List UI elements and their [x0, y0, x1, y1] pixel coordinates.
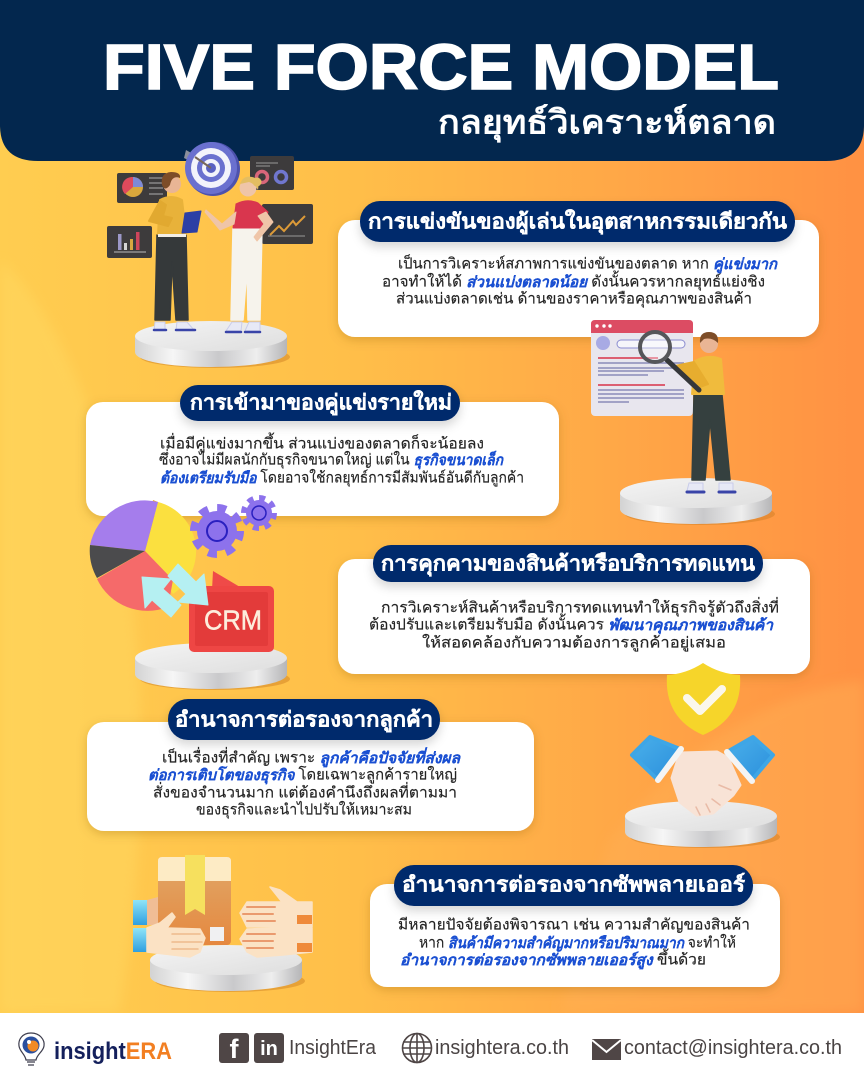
panel: donut charts [250, 156, 294, 190]
pie chart [90, 500, 196, 611]
heading pill [360, 201, 795, 242]
parcel box [158, 855, 231, 945]
browser window [591, 320, 693, 416]
illustration: box and hands [133, 855, 312, 992]
body text: มีหลายปัจจัยต้องพิจารณา เช่น ความสำคัญของสินค้า [398, 916, 750, 934]
card [338, 220, 819, 337]
card [338, 559, 810, 674]
icon: target [184, 142, 240, 196]
illustration: shield and handshake [625, 663, 780, 848]
panel: rivalry [338, 201, 819, 337]
body text: ต้องปรับและเตรียมรับมือ ดังนั้นควร พัฒนาคุณภาพของสินค้า [369, 614, 775, 634]
footer [0, 1013, 864, 1080]
illustration: team with charts and target [107, 142, 313, 368]
panel: substitutes [338, 545, 810, 674]
heading pill: การเข้ามาของคู่แข่งรายใหม่ [190, 390, 452, 416]
panel: supplier power [370, 865, 780, 987]
logo: insightERA [54, 1038, 172, 1064]
heading pill: อำนาจการต่อรองจากซัพพลายเออร์ [402, 872, 746, 896]
illustration: pie chart and CRM [90, 498, 290, 690]
icon: gears [194, 498, 274, 554]
panel: line chart [262, 204, 313, 244]
icon: facebook [219, 1033, 249, 1064]
heading pill [168, 699, 440, 740]
figure: man [675, 332, 735, 492]
body text [398, 916, 750, 970]
CRM badge: CRM [204, 604, 262, 636]
icon: arrows [142, 564, 208, 617]
body text: ให้สอดคล้องกับความต้องการลูกค้าอยู่เสมอ [422, 634, 726, 652]
icon: handshake [632, 737, 773, 815]
subtitle: กลยุทธ์วิเคราะห์ตลาด [438, 104, 776, 144]
icon: left hands [133, 897, 205, 957]
email: contact@insightera.co.th [624, 1037, 842, 1059]
body text [159, 432, 524, 488]
figure: man with tablet [149, 172, 201, 330]
card [370, 884, 780, 987]
body text: ของธุรกิจและนำไปปรับให้เหมาะสม [196, 800, 412, 820]
CRM badge [189, 571, 274, 652]
body text: ส่วนแบ่งตลาดเช่น ด้านของราคาหรือคุณภาพของสินค้า [396, 290, 752, 308]
icon: shield [667, 663, 740, 735]
body text: การวิเคราะห์สินค้าหรือบริการทดแทนทำให้ธุรกิจรู้ตัวถึงสิ่งที่ [381, 596, 779, 618]
icon: envelope [592, 1039, 621, 1060]
body text [369, 596, 779, 652]
icon: linkedin: in [260, 1038, 278, 1060]
panel: new entrants [86, 385, 559, 516]
icon: right hands [240, 887, 312, 957]
title: FIVE FORCE MODEL [103, 31, 779, 103]
body text: ซึ่งอาจไม่มีผลนักกับธุรกิจขนาดใหญ่ แต่ใน ธุรกิจขนาดเล็ก [159, 448, 504, 470]
body text: เป็นการวิเคราะห์สภาพการแข่งขันของตลาด หาก คู่แข่งมาก [398, 254, 778, 274]
body text [148, 746, 461, 820]
body text: ต่อการเติบโตของธุรกิจ โดยเฉพาะลูกค้ารายใหญ่ [148, 764, 457, 784]
social handle: InsightEra [289, 1037, 377, 1059]
heading pill: การแข่งขันของผู้เล่นในอุตสาหกรรมเดียวกัน [368, 208, 788, 236]
heading pill [373, 545, 763, 582]
body text: อำนาจการต่อรองจากซัพพลายเออร์สูง ขึ้นด้วย [400, 948, 706, 970]
header band [0, 0, 864, 161]
card [86, 402, 559, 516]
body text: ต้องเตรียมรับมือ โดยอาจใช้กลยุทธ์การมีสัมพันธ์อันดีกับลูกค้า [160, 468, 524, 488]
figure: woman [205, 177, 273, 332]
heading pill [180, 385, 460, 421]
body text: หาก สินค้ามีความสำคัญมากหรือปริมาณมาก จะทำให้ [419, 934, 736, 952]
panel: buyer power [87, 699, 534, 831]
illustration: man with magnifier [591, 320, 775, 525]
heading pill: อำนาจการต่อรองจากลูกค้า [175, 708, 433, 734]
heading pill: การคุกคามของสินค้าหรือบริการทดแทน [381, 552, 756, 578]
icon: magnifier [640, 332, 699, 390]
logo [19, 1033, 172, 1065]
icon: facebook: f [230, 1034, 240, 1064]
panel: pie chart [117, 173, 167, 203]
body text: เมื่อมีคู่แข่งมากขึ้น ส่วนแบ่งของตลาดก็จะน้อยลง [160, 432, 484, 452]
body text: สั่งของจำนวนมาก แต่ต้องคำนึงถึงผลที่ตามมา [153, 782, 457, 802]
heading pill [394, 865, 753, 906]
body text: อาจทำให้ได้ ส่วนแบ่งตลาดน้อย ดังนั้นควรหากลยุทธ์แย่งชิง [382, 270, 765, 292]
card [87, 722, 534, 831]
panel: bar chart [107, 226, 152, 258]
icon: linkedin [254, 1033, 284, 1063]
body text: เป็นเรื่องที่สำคัญ เพราะ ลูกค้าคือปัจจัยที่ส่งผล [162, 746, 461, 768]
icon: globe [402, 1034, 432, 1062]
body text [382, 254, 778, 308]
website: insightera.co.th [435, 1037, 569, 1059]
